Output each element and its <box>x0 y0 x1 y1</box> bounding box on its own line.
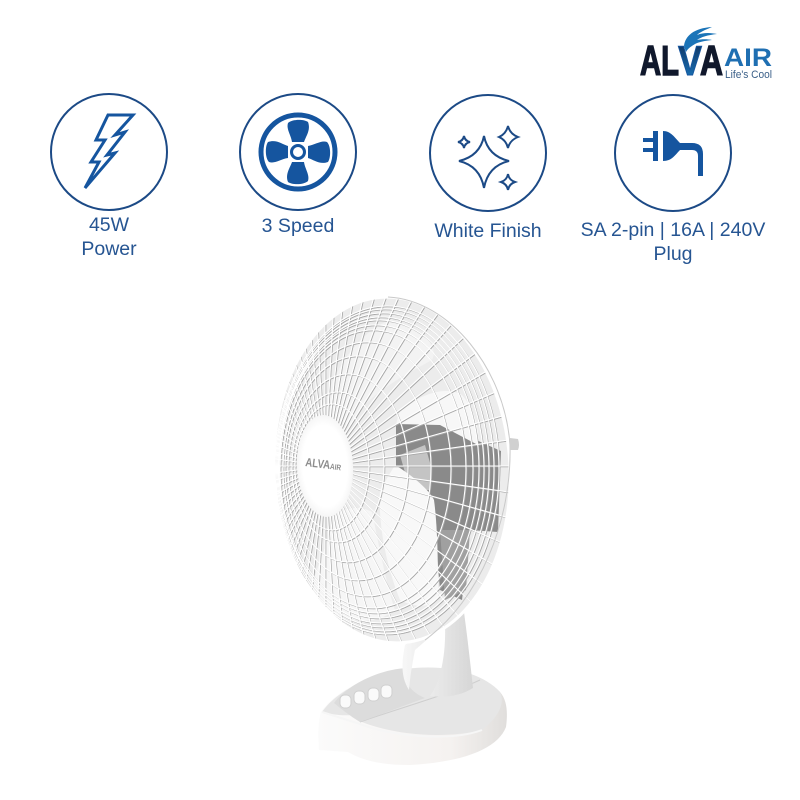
label: 3 Speed: 3 Speed <box>262 215 334 237</box>
fan blades <box>313 391 478 620</box>
feature: plug <box>581 95 765 265</box>
grille wires <box>276 298 508 642</box>
grille rim <box>265 291 519 649</box>
logo: AlvaAir <box>640 27 772 84</box>
fan stand neck <box>402 598 473 697</box>
icon: sparkles <box>430 95 546 211</box>
label: 45W Power: 45W <box>89 214 130 236</box>
icon: fan <box>240 94 356 210</box>
logo: AlvaAir: AL <box>640 37 679 84</box>
icon: plug <box>615 95 731 211</box>
logo: AlvaAir: Life's Cool <box>725 69 772 81</box>
control knobs <box>340 685 392 708</box>
side clip <box>510 438 519 450</box>
label: SA 2-pin plug: Plug <box>653 243 693 265</box>
grille rim edge <box>388 297 510 640</box>
icon: lightning bolt <box>51 94 167 210</box>
logo: AlvaAir: A <box>700 37 723 84</box>
fan stand base <box>318 668 507 765</box>
label: 45W Power: Power <box>81 238 137 260</box>
product: desk fan <box>276 296 519 765</box>
label: SA 2-pin plug: SA 2-pin | 16A | 240V <box>581 219 765 241</box>
logo: AlvaAir: V <box>678 37 702 84</box>
grille backing <box>266 292 518 648</box>
motor housing <box>396 424 501 600</box>
logo: AlvaAir: AIR <box>724 44 772 72</box>
hub logo: ALVAAIR <box>305 455 342 473</box>
centre hub <box>294 414 356 518</box>
feature: 45W power <box>51 94 167 260</box>
feature: white finish <box>430 95 546 242</box>
feature: 3 speed <box>240 94 356 237</box>
fan head <box>276 296 519 644</box>
label: White Finish: White Finish <box>434 220 542 242</box>
